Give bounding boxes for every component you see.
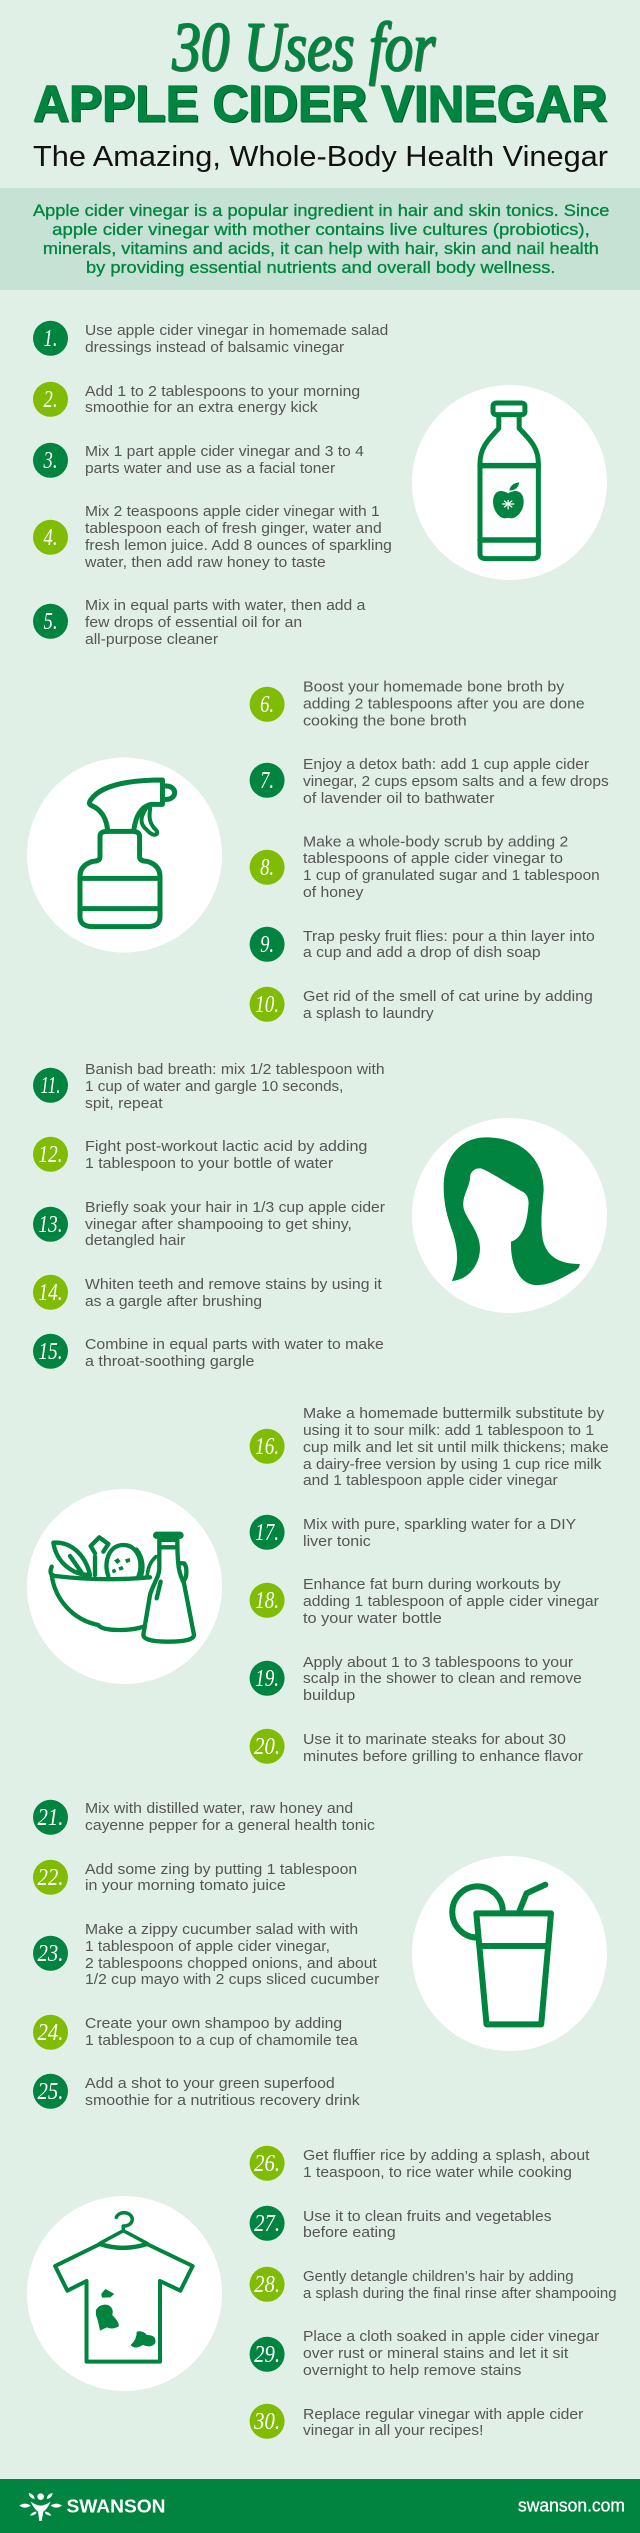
use 16 xyxy=(250,1406,609,1489)
number badge 15 xyxy=(33,1334,68,1369)
use 22 xyxy=(33,1860,357,1895)
use 20 xyxy=(250,1729,583,1765)
text 21: Mix with distilled water, raw honey and xyxy=(85,1801,353,1817)
use 25 xyxy=(33,2074,361,2109)
number badge 11 xyxy=(33,1068,68,1103)
number badge 19: 19. xyxy=(255,1666,279,1692)
number badge 29: 29. xyxy=(254,2342,280,2368)
illustration: spray bottle xyxy=(27,758,222,952)
text 11: spit, repeat xyxy=(85,1096,163,1112)
use 29 xyxy=(250,2329,599,2379)
use 27 xyxy=(250,2206,552,2241)
text 29: Place a cloth soaked in apple cider vinegar xyxy=(303,2329,599,2345)
use 30 xyxy=(250,2404,584,2439)
use 28 xyxy=(250,2267,616,2302)
text 6: cooking the bone broth xyxy=(303,714,467,730)
icon: shirt on hanger xyxy=(55,2213,193,2362)
text 17: Mix with pure, sparkling water for a DIY xyxy=(303,1517,576,1533)
text 8: tablespoons of apple cider vinegar to xyxy=(303,851,563,867)
text 15 xyxy=(85,1337,384,1370)
text 11: 1 cup of water and gargle 10 seconds, xyxy=(85,1079,343,1095)
use 7 xyxy=(250,757,609,807)
text 4: tablespoon each of fresh ginger, water and xyxy=(85,521,382,537)
text 10 xyxy=(303,989,593,1022)
number badge 8 xyxy=(250,850,285,885)
number badge 18: 18. xyxy=(255,1588,279,1614)
text 23 xyxy=(85,1922,379,1988)
text 2 xyxy=(85,384,360,416)
title xyxy=(33,9,607,132)
illustration: drink xyxy=(412,1856,607,2051)
number badge 30: 30. xyxy=(253,2409,280,2435)
number badge 20: 20. xyxy=(254,1734,280,1760)
text 12 xyxy=(85,1139,367,1172)
number badge 16: 16. xyxy=(255,1434,279,1460)
text 5: few drops of essential oil for an xyxy=(85,615,302,631)
icon: hair silhouette xyxy=(444,1137,580,1285)
text 27: Use it to clean fruits and vegetables xyxy=(303,2209,552,2225)
text 6 xyxy=(303,680,585,730)
text 22: Add some zing by putting 1 tablespoon xyxy=(85,1862,357,1878)
text 6: Boost your homemade bone broth by xyxy=(303,680,565,696)
number badge 9: 9. xyxy=(260,932,274,958)
number badge 21 xyxy=(33,1800,68,1835)
text 10: a splash to laundry xyxy=(303,1006,434,1022)
text 14 xyxy=(85,1277,382,1310)
number badge 6 xyxy=(250,687,285,722)
text 1: dressings instead of balsamic vinegar xyxy=(85,340,344,356)
text 25: smoothie for a nutritious recovery drink xyxy=(85,2093,361,2109)
number badge 19 xyxy=(250,1661,285,1696)
number badge 26 xyxy=(250,2146,285,2181)
text 18: adding 1 tablespoon of apple cider vinegar xyxy=(303,1594,599,1610)
text 7 xyxy=(303,757,609,807)
text 21: cayenne pepper for a general health tonic xyxy=(85,1818,375,1834)
number badge 2 xyxy=(33,382,68,417)
text 8: 1 cup of granulated sugar and 1 tablespoon xyxy=(303,868,600,884)
text 27: before eating xyxy=(303,2225,396,2241)
text 18: to your water bottle xyxy=(303,1611,442,1627)
icon: salad bowl and bottle xyxy=(51,1535,194,1642)
number badge 27 xyxy=(250,2206,285,2241)
number badge 25 xyxy=(33,2074,68,2109)
illustration: hair xyxy=(412,1118,607,1313)
text 5: all-purpose cleaner xyxy=(85,632,218,648)
use 18 xyxy=(250,1577,599,1627)
text 6: adding 2 tablespoons after you are done xyxy=(303,697,585,713)
text 16: and 1 tablespoon apple cider vinegar xyxy=(303,1473,558,1489)
text 15: Combine in equal parts with water to make xyxy=(85,1337,384,1353)
use 26 xyxy=(250,2146,590,2181)
text 13: Briefly soak your hair in 1/3 cup apple cider xyxy=(85,1200,385,1216)
number badge 23: 23. xyxy=(38,1941,64,1967)
text 8: Make a whole-body scrub by adding 2 xyxy=(303,835,568,851)
text 25 xyxy=(85,2076,361,2109)
text 28: a splash during the final rinse after shampooing xyxy=(303,2286,616,2302)
number badge 27: 27. xyxy=(254,2211,280,2237)
number badge 13 xyxy=(33,1207,68,1242)
text 2: Add 1 to 2 tablespoons to your morning xyxy=(85,384,360,400)
text 26: 1 teaspoon, to rice water while cooking xyxy=(303,2165,572,2181)
intro text: apple cider vinegar with mother contains live cultures (probiotics), xyxy=(52,221,590,239)
text 12: Fight post-workout lactic acid by adding xyxy=(85,1139,367,1155)
use 14 xyxy=(33,1275,382,1310)
text 23: 1/2 cup mayo with 2 cups sliced cucumber xyxy=(85,1972,379,1988)
text 13: detangled hair xyxy=(85,1233,186,1249)
text 5 xyxy=(85,598,366,648)
number badge 29 xyxy=(250,2337,285,2372)
text 4 xyxy=(84,504,392,571)
number badge 7: 7. xyxy=(260,768,274,794)
text 19: buildup xyxy=(303,1688,355,1704)
text 8 xyxy=(303,835,600,901)
text 4: Mix 2 teaspoons apple cider vinegar with 1 xyxy=(85,504,380,520)
text 10: Get rid of the smell of cat urine by adding xyxy=(303,989,593,1005)
text 30: vinegar in all your recipes! xyxy=(303,2423,483,2439)
use 9 xyxy=(250,927,595,962)
text 17: liver tonic xyxy=(303,1534,371,1550)
text 26 xyxy=(303,2148,590,2181)
text 16: a dairy-free version by using 1 cup rice milk xyxy=(303,1457,602,1473)
number badge 28 xyxy=(250,2267,285,2302)
icon: bottle xyxy=(480,403,538,559)
text 3 xyxy=(85,444,364,477)
use 23 xyxy=(33,1922,379,1988)
text 14: Whiten teeth and remove stains by using it xyxy=(85,1277,382,1293)
number badge 17 xyxy=(250,1515,285,1550)
text 23: 1 tablespoon of apple cider vinegar, xyxy=(85,1939,330,1955)
text 16: Make a homemade buttermilk substitute by xyxy=(303,1406,605,1422)
use 17 xyxy=(250,1515,576,1550)
website: swanson.com xyxy=(518,2496,625,2516)
icon: spray bottle xyxy=(80,780,175,927)
use 19 xyxy=(250,1655,582,1704)
number badge 3 xyxy=(33,443,68,478)
text 18: Enhance fat burn during workouts by xyxy=(303,1577,561,1593)
text 21 xyxy=(85,1801,375,1834)
title script line: 30 Uses for xyxy=(171,9,436,86)
number badge 30 xyxy=(250,2404,285,2439)
text 24 xyxy=(85,2016,359,2049)
illustration: stained shirt xyxy=(27,2196,222,2391)
number badge 14 xyxy=(33,1275,68,1310)
text 23: 2 tablespoons chopped onions, and about xyxy=(85,1956,377,1972)
number badge 14: 14. xyxy=(38,1280,62,1306)
use 6 xyxy=(250,680,585,730)
text 9: a cup and add a drop of dish soap xyxy=(303,945,541,961)
text 19 xyxy=(303,1655,582,1704)
text 17 xyxy=(303,1517,576,1550)
number badge 1 xyxy=(33,321,68,356)
text 14: as a gargle after brushing xyxy=(85,1294,262,1310)
number badge 24 xyxy=(33,2015,68,2050)
text 13 xyxy=(85,1200,385,1249)
text 11 xyxy=(85,1062,385,1112)
logo mark xyxy=(19,2493,62,2521)
icon: glass with lemon and straw xyxy=(452,1885,551,2024)
number badge 24: 24. xyxy=(38,2020,64,2046)
text 20: minutes before grilling to enhance flavor xyxy=(303,1749,583,1765)
text 4: fresh lemon juice. Add 8 ounces of sparkling xyxy=(85,538,392,554)
text 20 xyxy=(303,1732,583,1765)
number badge 8: 8. xyxy=(260,855,274,881)
text 2: smoothie for an extra energy kick xyxy=(85,400,319,416)
use 2 xyxy=(33,382,360,417)
use 1 xyxy=(33,321,388,356)
use 3 xyxy=(33,443,364,478)
text 23: Make a zippy cucumber salad with with xyxy=(85,1922,358,1938)
text 12: 1 tablespoon to your bottle of water xyxy=(85,1156,333,1172)
text 27 xyxy=(303,2209,552,2241)
number badge 12: 12. xyxy=(38,1142,62,1168)
text 28 xyxy=(303,2269,616,2302)
text 13: vinegar after shampooing to get shiny, xyxy=(85,1217,352,1233)
text 20: Use it to marinate steaks for about 30 xyxy=(303,1732,566,1748)
text 22 xyxy=(85,1862,357,1894)
logo wordmark: SWANSON xyxy=(66,2496,166,2516)
intro band xyxy=(0,188,640,290)
number badge 15: 15. xyxy=(38,1339,62,1365)
title main line: APPLE CIDER VINEGAR xyxy=(33,75,607,132)
number badge 16 xyxy=(250,1429,285,1464)
number badge 21: 21. xyxy=(38,1805,64,1831)
number badge 9 xyxy=(250,927,285,962)
use 21 xyxy=(33,1800,375,1835)
text 7: Enjoy a detox bath: add 1 cup apple cider xyxy=(303,757,589,773)
number badge 3: 3. xyxy=(43,448,58,474)
footer xyxy=(0,2479,640,2533)
text 26: Get fluffier rice by adding a splash, about xyxy=(303,2148,590,2164)
text 16: using it to sour milk: add 1 tablespoon to 1 xyxy=(303,1423,594,1439)
use 10 xyxy=(250,987,593,1022)
number badge 22 xyxy=(33,1860,68,1895)
number badge 20 xyxy=(250,1729,285,1764)
text 30: Replace regular vinegar with apple cider xyxy=(303,2407,584,2423)
text 29: over rust or mineral stains and let it sit xyxy=(303,2346,568,2362)
use 24 xyxy=(33,2015,359,2050)
text 1: Use apple cider vinegar in homemade salad xyxy=(85,323,388,339)
number badge 17: 17. xyxy=(255,1520,279,1546)
text 4: water, then add raw honey to taste xyxy=(84,555,326,571)
text 11: Banish bad breath: mix 1/2 tablespoon with xyxy=(85,1062,385,1078)
number badge 6: 6. xyxy=(260,692,274,718)
text 1 xyxy=(85,323,388,356)
text 24: 1 tablespoon to a cup of chamomile tea xyxy=(85,2033,359,2049)
text 5: Mix in equal parts with water, then add a xyxy=(85,598,366,614)
number badge 7 xyxy=(250,763,285,798)
use 13 xyxy=(33,1200,385,1249)
text 3: Mix 1 part apple cider vinegar and 3 to 4 xyxy=(85,444,364,460)
number badge 26: 26. xyxy=(254,2151,280,2177)
text 19: Apply about 1 to 3 tablespoons to your xyxy=(303,1655,573,1671)
use 4 xyxy=(33,504,392,571)
number badge 13: 13. xyxy=(38,1212,62,1238)
number badge 5 xyxy=(33,604,68,639)
illustration: salad and dressing xyxy=(27,1489,222,1684)
number badge 4: 4. xyxy=(44,525,58,551)
text 28: Gently detangle children’s hair by adding xyxy=(303,2269,574,2285)
text 24: Create your own shampoo by adding xyxy=(85,2016,342,2032)
use 12 xyxy=(33,1137,367,1172)
number badge 23 xyxy=(33,1936,68,1971)
use 8 xyxy=(250,835,600,901)
text 15: a throat-soothing gargle xyxy=(85,1354,254,1370)
number badge 11: 11. xyxy=(40,1073,60,1099)
text 3: parts water and use as a facial toner xyxy=(85,461,335,477)
number badge 2: 2. xyxy=(44,387,58,413)
use 5 xyxy=(33,598,366,648)
number badge 12 xyxy=(33,1137,68,1172)
text 25: Add a shot to your green superfood xyxy=(85,2076,335,2092)
use 15 xyxy=(33,1334,384,1370)
text 29: overnight to help remove stains xyxy=(303,2363,521,2379)
number badge 5: 5. xyxy=(44,609,58,635)
text 30 xyxy=(303,2407,584,2439)
number badge 1: 1. xyxy=(44,326,58,352)
text 7: of lavender oil to bathwater xyxy=(303,791,495,807)
number badge 22: 22. xyxy=(38,1865,64,1891)
text 16: cup milk and let sit until milk thickens; make xyxy=(303,1440,609,1456)
text 22: in your morning tomato juice xyxy=(85,1878,286,1894)
intro text xyxy=(33,202,609,277)
number badge 18 xyxy=(250,1583,285,1618)
text 29 xyxy=(303,2329,599,2379)
text 19: scalp in the shower to clean and remove xyxy=(303,1671,582,1687)
number badge 10: 10. xyxy=(255,992,279,1018)
number badge 25: 25. xyxy=(38,2079,64,2105)
text 18 xyxy=(303,1577,599,1627)
illustration: vinegar bottle xyxy=(412,385,607,580)
number badge 28: 28. xyxy=(254,2272,280,2298)
intro text: Apple cider vinegar is a popular ingredient in hair and skin tonics. Since xyxy=(33,202,609,220)
intro text: by providing essential nutrients and overall body wellness. xyxy=(86,259,556,277)
subtitle: The Amazing, Whole-Body Health Vinegar xyxy=(33,141,608,173)
text 9: Trap pesky fruit flies: pour a thin layer into xyxy=(303,929,595,945)
text 9 xyxy=(303,929,595,961)
text 8: of honey xyxy=(303,885,364,901)
number badge 10 xyxy=(250,987,285,1022)
intro text: minerals, vitamins and acids, it can help with hair, skin and nail health xyxy=(43,240,599,258)
text 16 xyxy=(303,1406,609,1489)
text 7: vinegar, 2 cups epsom salts and a few drops xyxy=(303,774,609,790)
use 11 xyxy=(33,1062,385,1112)
number badge 4 xyxy=(33,520,68,555)
